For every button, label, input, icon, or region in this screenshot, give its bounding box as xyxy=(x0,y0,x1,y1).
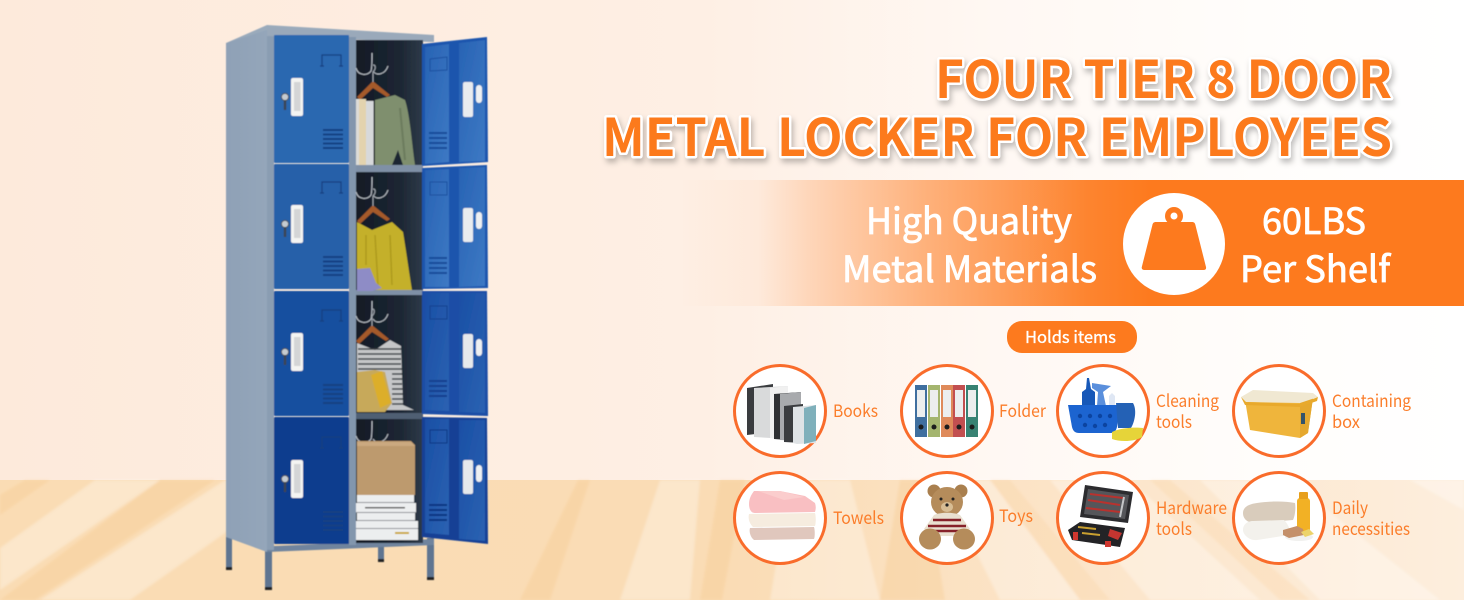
right door 1 xyxy=(422,37,488,166)
item: books xyxy=(734,366,878,456)
left door 4 xyxy=(274,417,349,544)
band text: capacity: 60LBS xyxy=(1262,193,1366,245)
label: folder: Folder xyxy=(999,397,1046,422)
label: hardware tools xyxy=(1156,494,1227,540)
compartment 3 contents xyxy=(356,301,414,412)
compartment 4 contents xyxy=(356,421,418,540)
label: cleaning tools: Cleaning xyxy=(1156,387,1219,412)
label: daily necessities: Daily xyxy=(1332,494,1368,519)
right door 2 xyxy=(422,165,488,289)
item: toys xyxy=(902,472,1033,564)
holds items pill xyxy=(1007,321,1137,353)
right door 3 xyxy=(422,291,488,416)
label: cleaning tools: tools xyxy=(1156,408,1192,433)
wooden floor xyxy=(0,480,1464,600)
label: containing box xyxy=(1332,387,1411,433)
left door 2 xyxy=(274,164,349,289)
title xyxy=(602,38,1392,171)
item: containing box xyxy=(1234,366,1411,456)
icon: tool case xyxy=(1068,485,1133,547)
left door 1 xyxy=(274,35,349,163)
label: hardware tools: tools xyxy=(1156,515,1192,540)
icon: teddy bear xyxy=(919,484,975,550)
label: hardware tools: Hardware xyxy=(1156,494,1227,519)
label: containing box: box xyxy=(1332,408,1361,433)
label: towels: Towels xyxy=(833,504,884,529)
icon: cleaning basket xyxy=(1068,378,1143,441)
compartment 2 contents xyxy=(356,177,412,291)
item: folder xyxy=(902,366,1046,456)
band text: material xyxy=(842,193,1097,293)
band text: material: High Quality xyxy=(866,193,1072,245)
item: towels xyxy=(734,472,884,564)
title line 2: METAL LOCKER FOR EMPLOYEES xyxy=(602,96,1392,171)
label: containing box: Containing xyxy=(1332,387,1411,412)
label: toys: Toys xyxy=(999,502,1033,527)
left door 3 xyxy=(274,291,349,416)
icon: towels xyxy=(749,491,816,540)
item: cleaning tools xyxy=(1058,366,1219,456)
icon: towels, bottle and soap xyxy=(1243,492,1314,541)
holds items pill: Holds items xyxy=(1025,324,1116,348)
item: daily necessities xyxy=(1234,472,1410,564)
compartment 1 contents xyxy=(356,53,415,165)
icon: storage box xyxy=(1241,390,1318,438)
icon: weight xyxy=(1123,193,1225,295)
label: cleaning tools xyxy=(1156,387,1219,433)
icon: folders xyxy=(915,385,978,437)
locker top and side panels xyxy=(226,25,434,552)
label: daily necessities: necessities xyxy=(1332,515,1410,540)
band text: capacity xyxy=(1240,193,1391,293)
locker interior xyxy=(356,40,423,543)
title line 1: FOUR TIER 8 DOOR xyxy=(935,38,1392,113)
label: daily necessities xyxy=(1332,494,1410,540)
locker xyxy=(226,25,488,590)
right door 4 xyxy=(422,417,488,544)
band text: material: Metal Materials xyxy=(842,241,1097,293)
shelves xyxy=(356,165,423,419)
orange feature band xyxy=(680,180,1464,306)
item: hardware tools xyxy=(1058,472,1227,564)
icon: books xyxy=(747,384,816,444)
label: books: Books xyxy=(833,397,878,422)
locker legs xyxy=(226,534,434,590)
band text: capacity: Per Shelf xyxy=(1240,241,1391,293)
